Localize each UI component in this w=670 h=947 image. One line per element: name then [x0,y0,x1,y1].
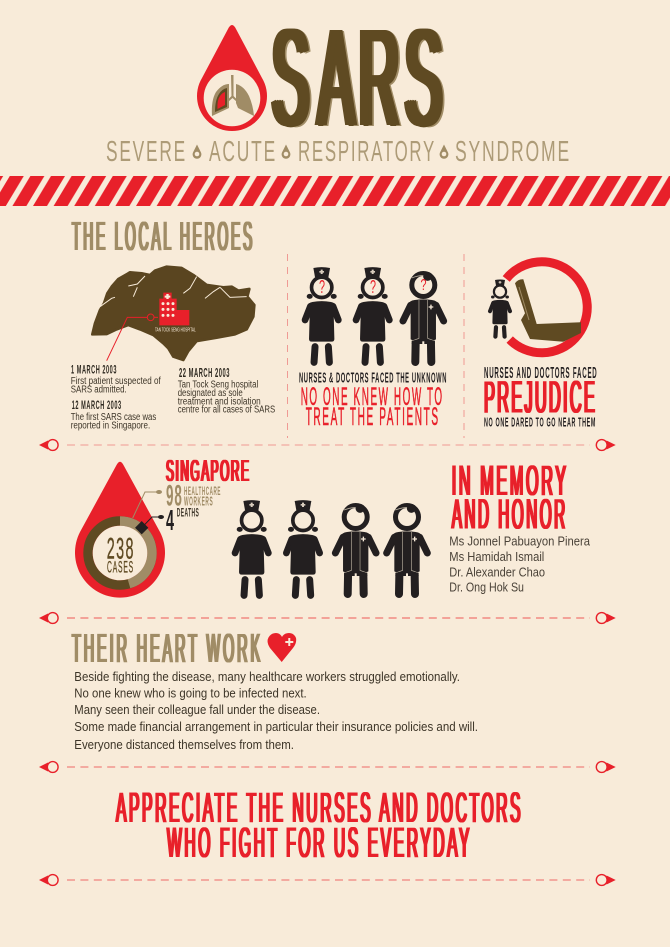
timeline text: 22 March 2003: 22 MARCH 2003 [179,365,230,380]
body text: emotional struggles: No one knew who is going to be infected next. [74,686,307,701]
divider [39,875,616,885]
title: SARS: S [405,1,442,155]
singapore statistics [166,454,250,537]
timeline text: 1 March 2003: SARS admitted. [71,384,127,396]
names list: Dr. Alexander Chao [449,565,545,580]
figures: four healthcare workers who died [235,500,427,595]
text: THEIR HEART WORK [72,625,263,671]
names list [449,534,591,595]
title: SARS: A [318,1,354,155]
body text: emotional struggles: Many seen their colleague fall under the disease. [74,702,320,717]
subtitle: severe acute respiratory syndrome: SYNDROME [455,136,571,168]
divider [39,762,616,772]
singapore statistics: 4 [166,505,174,537]
divider [39,613,616,623]
names list: Ms Jonnel Pabuayon Pinera [449,534,591,549]
text: NURSES & DOCTORS FACED THE UNKNOWN [299,371,447,387]
chart: 238 cases drop: 238 [107,532,135,565]
text: TREAT THE PATIENTS [306,403,440,431]
chart: 238 cases drop [75,462,165,598]
body text: emotional struggles: Everyone distanced themselves from them. [74,737,294,752]
timeline text: 22 March 2003: treatment and isolation [178,396,261,408]
body text: emotional struggles [74,669,478,752]
divider [39,440,616,450]
map of Singapore with hospital [92,267,254,361]
banner: red diagonal stripes [0,176,670,206]
timeline text: 1 March 2003: First patient suspected of [71,376,161,387]
icon: blood drop with lungs [197,25,267,131]
singapore statistics: DEATHS [177,508,199,520]
subtitle: severe acute respiratory syndrome: ACUTE [209,136,277,168]
chart: 238 cases drop: CASES [107,558,134,576]
figures: two nurses and a doctor facing the unknown: ? [370,277,376,297]
timeline text: 12 March 2003: reported in Singapore. [71,420,150,432]
timeline text: 22 March 2003 [178,365,275,416]
timeline text: 22 March 2003: centre for all cases of SARS [178,404,275,416]
icon: heart with cross [268,633,296,662]
timeline text: 22 March 2003: designated as sole [178,388,243,399]
text: SINGAPORE [166,454,250,488]
text: no one knew how to treat the patients [301,383,444,431]
title: SARS: S [272,1,309,155]
names list: Dr. Ong Hok Su [449,580,524,595]
heading: in memory and honor [452,457,569,538]
icon: hospital [159,293,189,325]
figures: two nurses and a doctor facing the unknown: ? [420,277,427,294]
title: SARS: R [359,1,399,155]
subtitle: severe acute respiratory syndrome: SEVERE [106,136,187,168]
timeline text: 1 March 2003: 1 MARCH 2003 [71,362,117,376]
singapore statistics: HEALTHCARE [184,484,221,498]
figures: two nurses and a doctor facing the unknown: ? [319,277,325,297]
figures: two nurses and a doctor facing the unknown [305,267,444,362]
singapore statistics: 98 [166,480,183,513]
body text: emotional struggles: Beside fighting the disease, many healthcare workers struggled emotionally. [74,669,460,684]
timeline text: 12 March 2003 [71,398,156,432]
names list: Ms Hamidah Ismail [449,549,544,564]
timeline text: 22 March 2003: Tan Tock Seng hospital [178,380,258,390]
subtitle: severe acute respiratory syndrome [106,136,571,168]
closing message [116,784,523,867]
text: nurses and doctors faced prejudice [484,365,598,430]
text: THE LOCAL HEROES [72,213,255,259]
title: SARS [270,1,444,155]
timeline text: 1 March 2003 [71,362,161,396]
connector: deaths [142,517,160,528]
body text: emotional struggles: Some made financial arrangement in particular their insurance policies and will. [74,719,478,734]
timeline text: 12 March 2003: 12 MARCH 2003 [72,398,122,412]
icon: nurse rejected by raised arm [490,262,587,353]
connector: healthcare workers [133,492,158,518]
map of Singapore with hospital: TAN TOCK SENG HOSPITAL [155,328,196,334]
singapore statistics: WORKERS [184,495,213,509]
text: NO ONE KNEW HOW TO [301,383,444,411]
timeline text: 12 March 2003: The first SARS case was [71,412,156,423]
subtitle: severe acute respiratory syndrome: RESPIRATORY [298,136,436,168]
